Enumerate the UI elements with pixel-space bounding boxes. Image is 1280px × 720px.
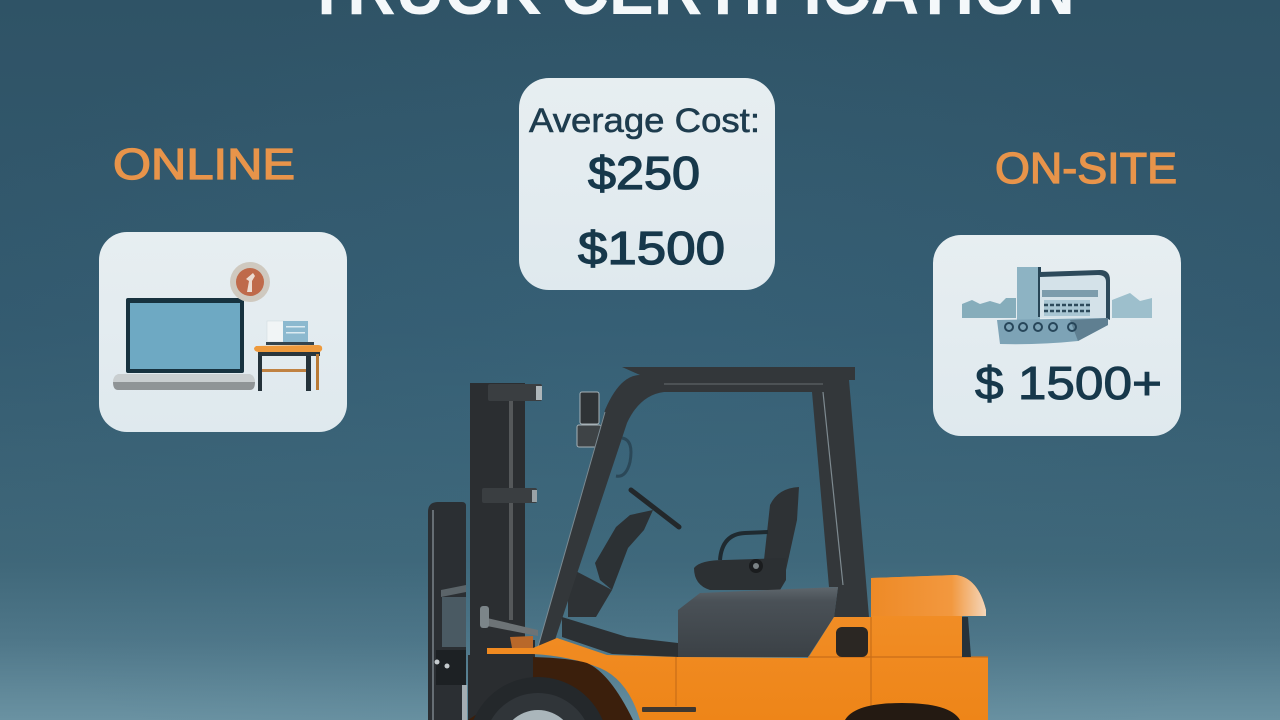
- panel: on-site: [933, 235, 1181, 436]
- steering assembly: [568, 438, 679, 617]
- body: [487, 575, 988, 720]
- forklift: [428, 367, 988, 720]
- value: on-site cost: $ 1500+: [975, 357, 1162, 409]
- panel: online: [99, 232, 347, 432]
- fork carriage: [428, 502, 467, 720]
- icon: badge: [230, 262, 270, 302]
- mast: [470, 383, 542, 720]
- icon: laptop: [113, 298, 255, 390]
- seat: [694, 487, 799, 590]
- panel: average cost: [519, 78, 775, 290]
- value: high cost: $1500: [578, 222, 725, 274]
- seat base: [678, 587, 838, 657]
- icon: desk: [254, 321, 322, 391]
- front wheel: [468, 655, 633, 720]
- canopy: [538, 367, 869, 647]
- heading: on-site: ON-SITE: [995, 144, 1177, 193]
- value: low cost: $250: [588, 147, 700, 199]
- mirror: [577, 392, 601, 447]
- floor: [562, 617, 678, 657]
- heading: online: ONLINE: [113, 140, 295, 189]
- label: average cost: Average Cost:: [529, 102, 760, 140]
- icon: factory: [962, 267, 1152, 344]
